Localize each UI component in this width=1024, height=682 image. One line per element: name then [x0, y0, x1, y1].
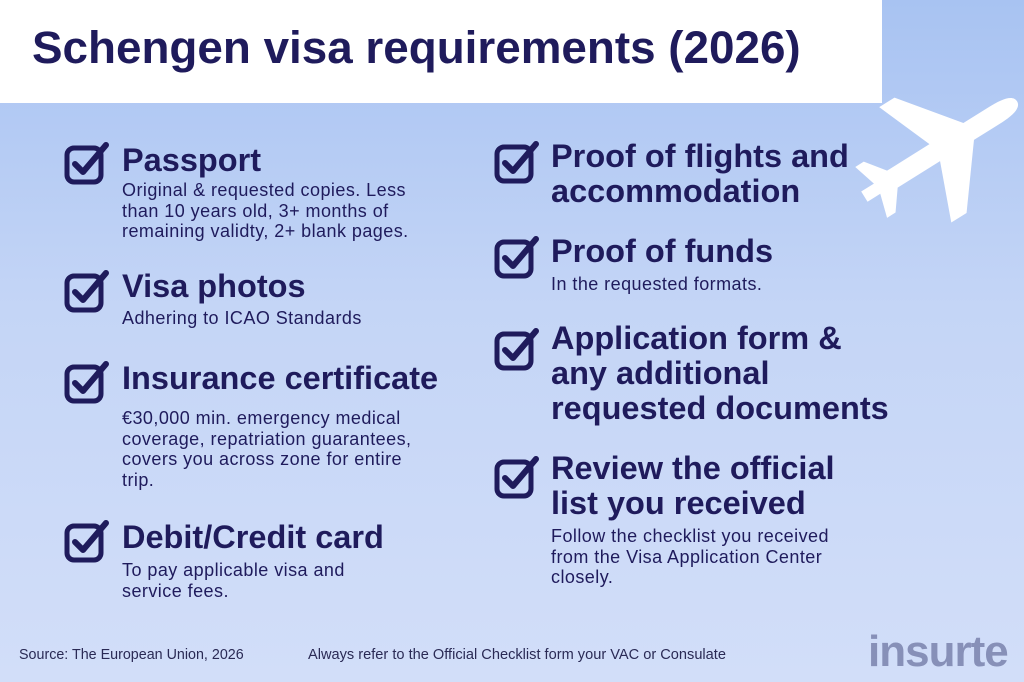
item: insurance: Insurance certificate	[122, 360, 438, 396]
item: passport: Passport	[122, 142, 261, 178]
icon: checkbox	[494, 236, 539, 278]
item: visa photos: Adhering to ICAO Standards	[122, 308, 362, 328]
item: review: closely.	[551, 567, 613, 587]
item: insurance: covers you across zone for entire	[122, 449, 402, 469]
item: card	[64, 519, 384, 600]
item: passport	[64, 142, 409, 241]
item: card: service fees.	[122, 580, 229, 600]
item: card: Debit/Credit card	[122, 519, 384, 555]
icon: checkbox	[494, 141, 539, 184]
icon: checkbox	[494, 328, 539, 370]
footer: source: Source: The European Union, 2026	[19, 647, 244, 663]
item: insurance: coverage, repatriation guarantees,	[122, 428, 411, 448]
item: insurance	[64, 360, 438, 490]
icon: checkbox	[64, 142, 109, 184]
item: insurance: €30,000 min. emergency medical	[122, 408, 401, 428]
header box	[0, 0, 882, 103]
item: application form	[494, 320, 889, 426]
title: Schengen visa requirements (2026)	[32, 22, 801, 73]
item: funds	[494, 233, 773, 294]
item: application form: Application form &	[551, 320, 842, 356]
item: funds: In the requested formats.	[551, 274, 762, 294]
footer: note: Always refer to the Official Checklist form your VAC or Consulate	[308, 647, 726, 663]
item: flights	[494, 138, 849, 209]
icon: checkbox	[64, 361, 109, 404]
item: passport: remaining validty, 2+ blank pages.	[122, 221, 409, 241]
icon: airplane	[856, 98, 1018, 222]
item: visa photos	[64, 268, 362, 328]
item: passport: than 10 years old, 3+ months of	[122, 200, 389, 220]
icon: checkbox	[64, 270, 109, 312]
item: application form: any additional	[551, 355, 770, 391]
item: card: To pay applicable visa and	[122, 560, 345, 580]
item: funds: Proof of funds	[551, 233, 773, 269]
icon: checkbox	[64, 520, 109, 562]
item: flights: accommodation	[551, 173, 800, 209]
item: visa photos: Visa photos	[122, 268, 306, 304]
item: insurance: trip.	[122, 470, 154, 490]
item: review: Follow the checklist you received	[551, 526, 829, 546]
item: review: from the Visa Application Center	[551, 546, 822, 566]
item: passport: Original & requested copies. Less	[122, 180, 406, 200]
item: review	[494, 450, 835, 587]
logo: insurte: insurte	[868, 627, 1008, 676]
icon: checkbox	[494, 456, 539, 498]
item: application form: requested documents	[551, 390, 889, 426]
item: review: Review the official	[551, 450, 835, 486]
item: review: list you received	[551, 485, 806, 521]
item: flights: Proof of flights and	[551, 138, 849, 174]
